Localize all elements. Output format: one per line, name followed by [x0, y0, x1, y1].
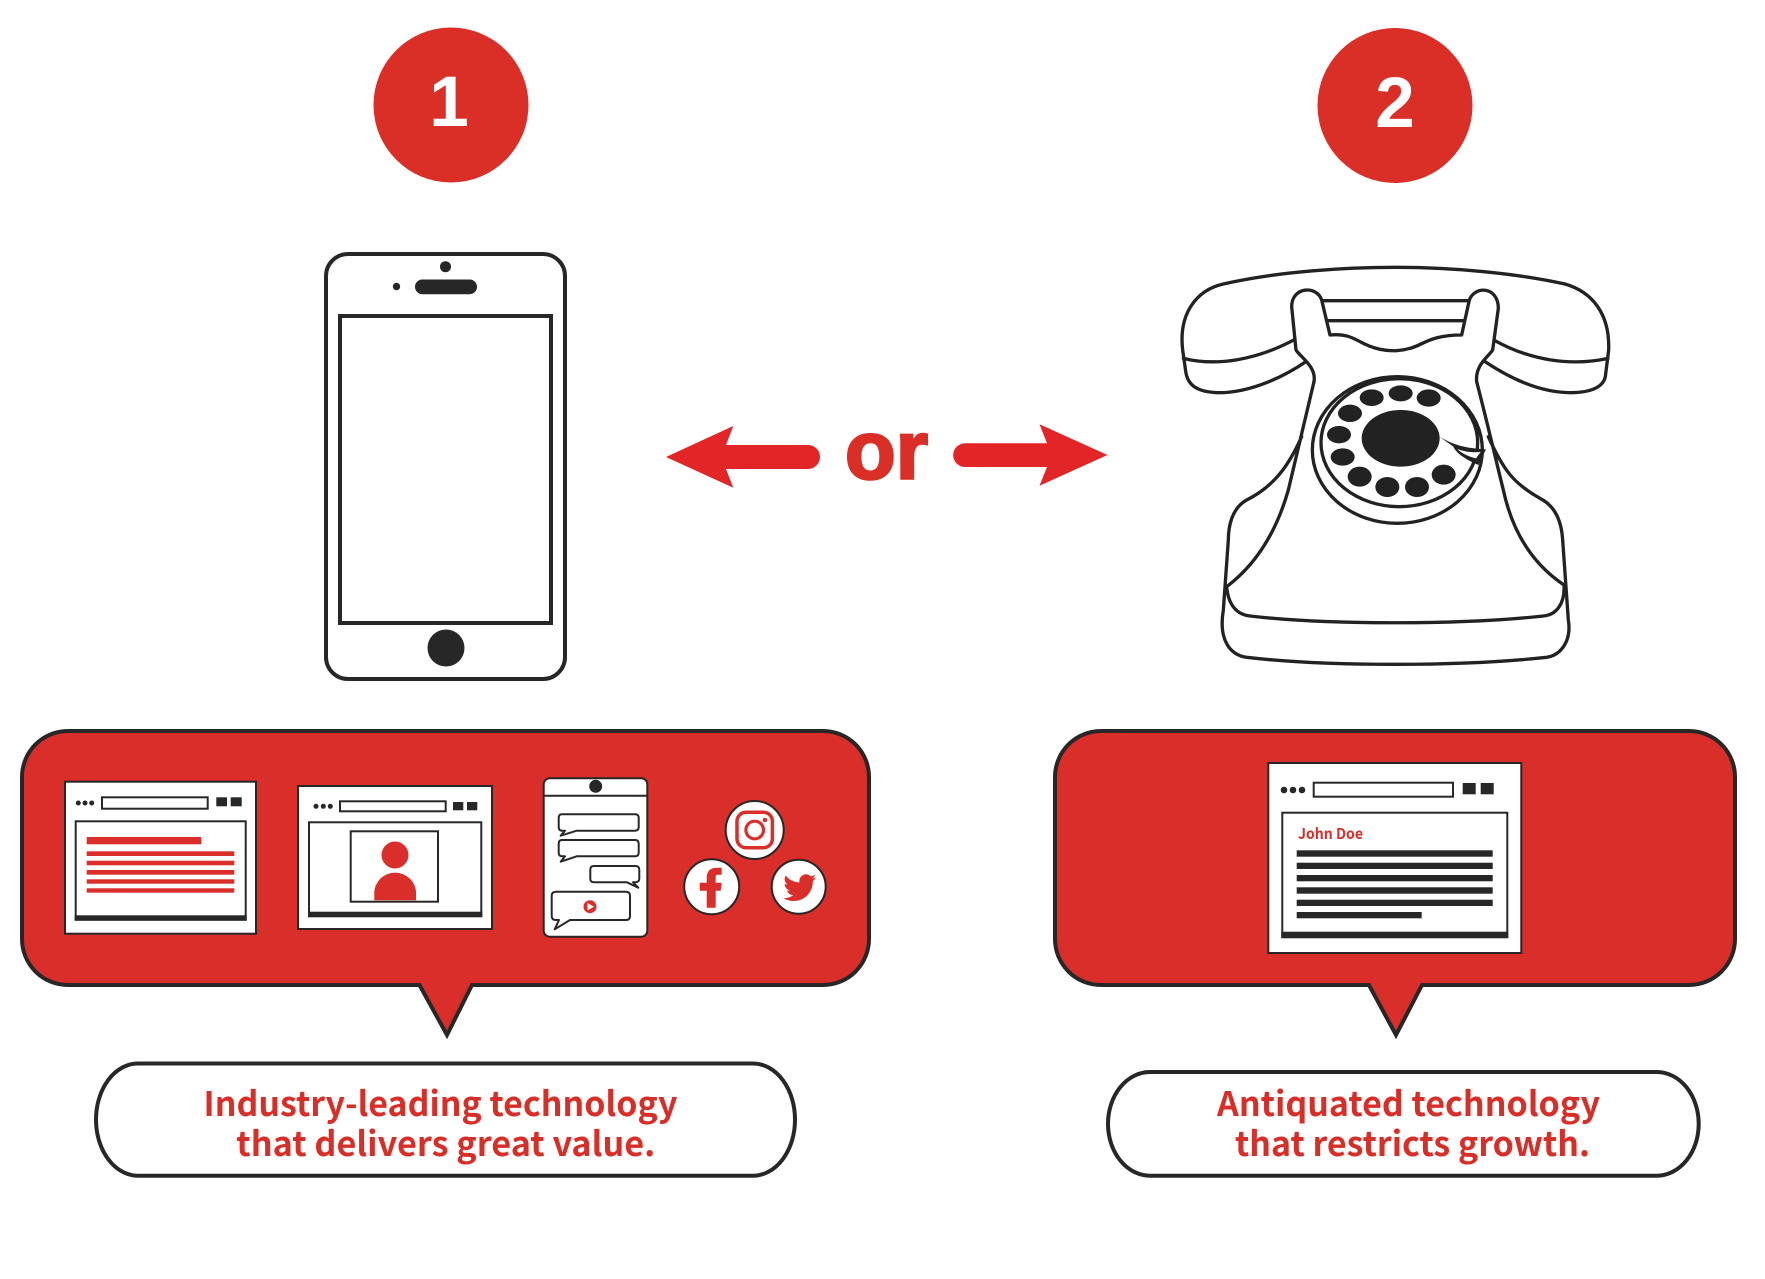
browser window: profile photo	[298, 786, 492, 929]
number badge 2: 2	[1375, 64, 1415, 143]
body and base	[1222, 382, 1569, 664]
arrow: right	[953, 424, 1108, 486]
arrow: left	[666, 426, 820, 488]
number badge 1	[374, 28, 528, 182]
rotary dial	[1312, 377, 1486, 523]
panel: antiquated technology speech bubble	[1055, 731, 1735, 1035]
browser window: John Doe document	[1268, 763, 1521, 953]
icon: smartphone	[326, 254, 565, 679]
icon: facebook	[684, 859, 739, 914]
caption: antiquated technology: Antiquated technology	[1216, 1077, 1600, 1126]
cradle	[1292, 290, 1498, 382]
icon: rotary telephone	[1182, 267, 1609, 664]
browser window: text article	[65, 782, 256, 934]
caption: antiquated technology	[1108, 1072, 1699, 1176]
chat phone screen	[544, 778, 647, 937]
handset	[1182, 267, 1609, 393]
caption: modern technology: Industry-leading technology	[204, 1077, 678, 1126]
panel: modern technology speech bubble	[22, 731, 869, 1035]
caption: modern technology	[96, 1064, 795, 1176]
or label: or	[845, 404, 928, 496]
caption: antiquated technology: that restricts growth.	[1235, 1117, 1590, 1166]
browser window: John Doe document: John Doe	[1298, 823, 1363, 844]
icon: instagram	[726, 801, 784, 859]
number badge 2	[1318, 28, 1472, 183]
caption: modern technology: that delivers great value.	[236, 1117, 655, 1166]
number badge 1: 1	[429, 63, 469, 142]
icon: twitter	[772, 860, 826, 914]
